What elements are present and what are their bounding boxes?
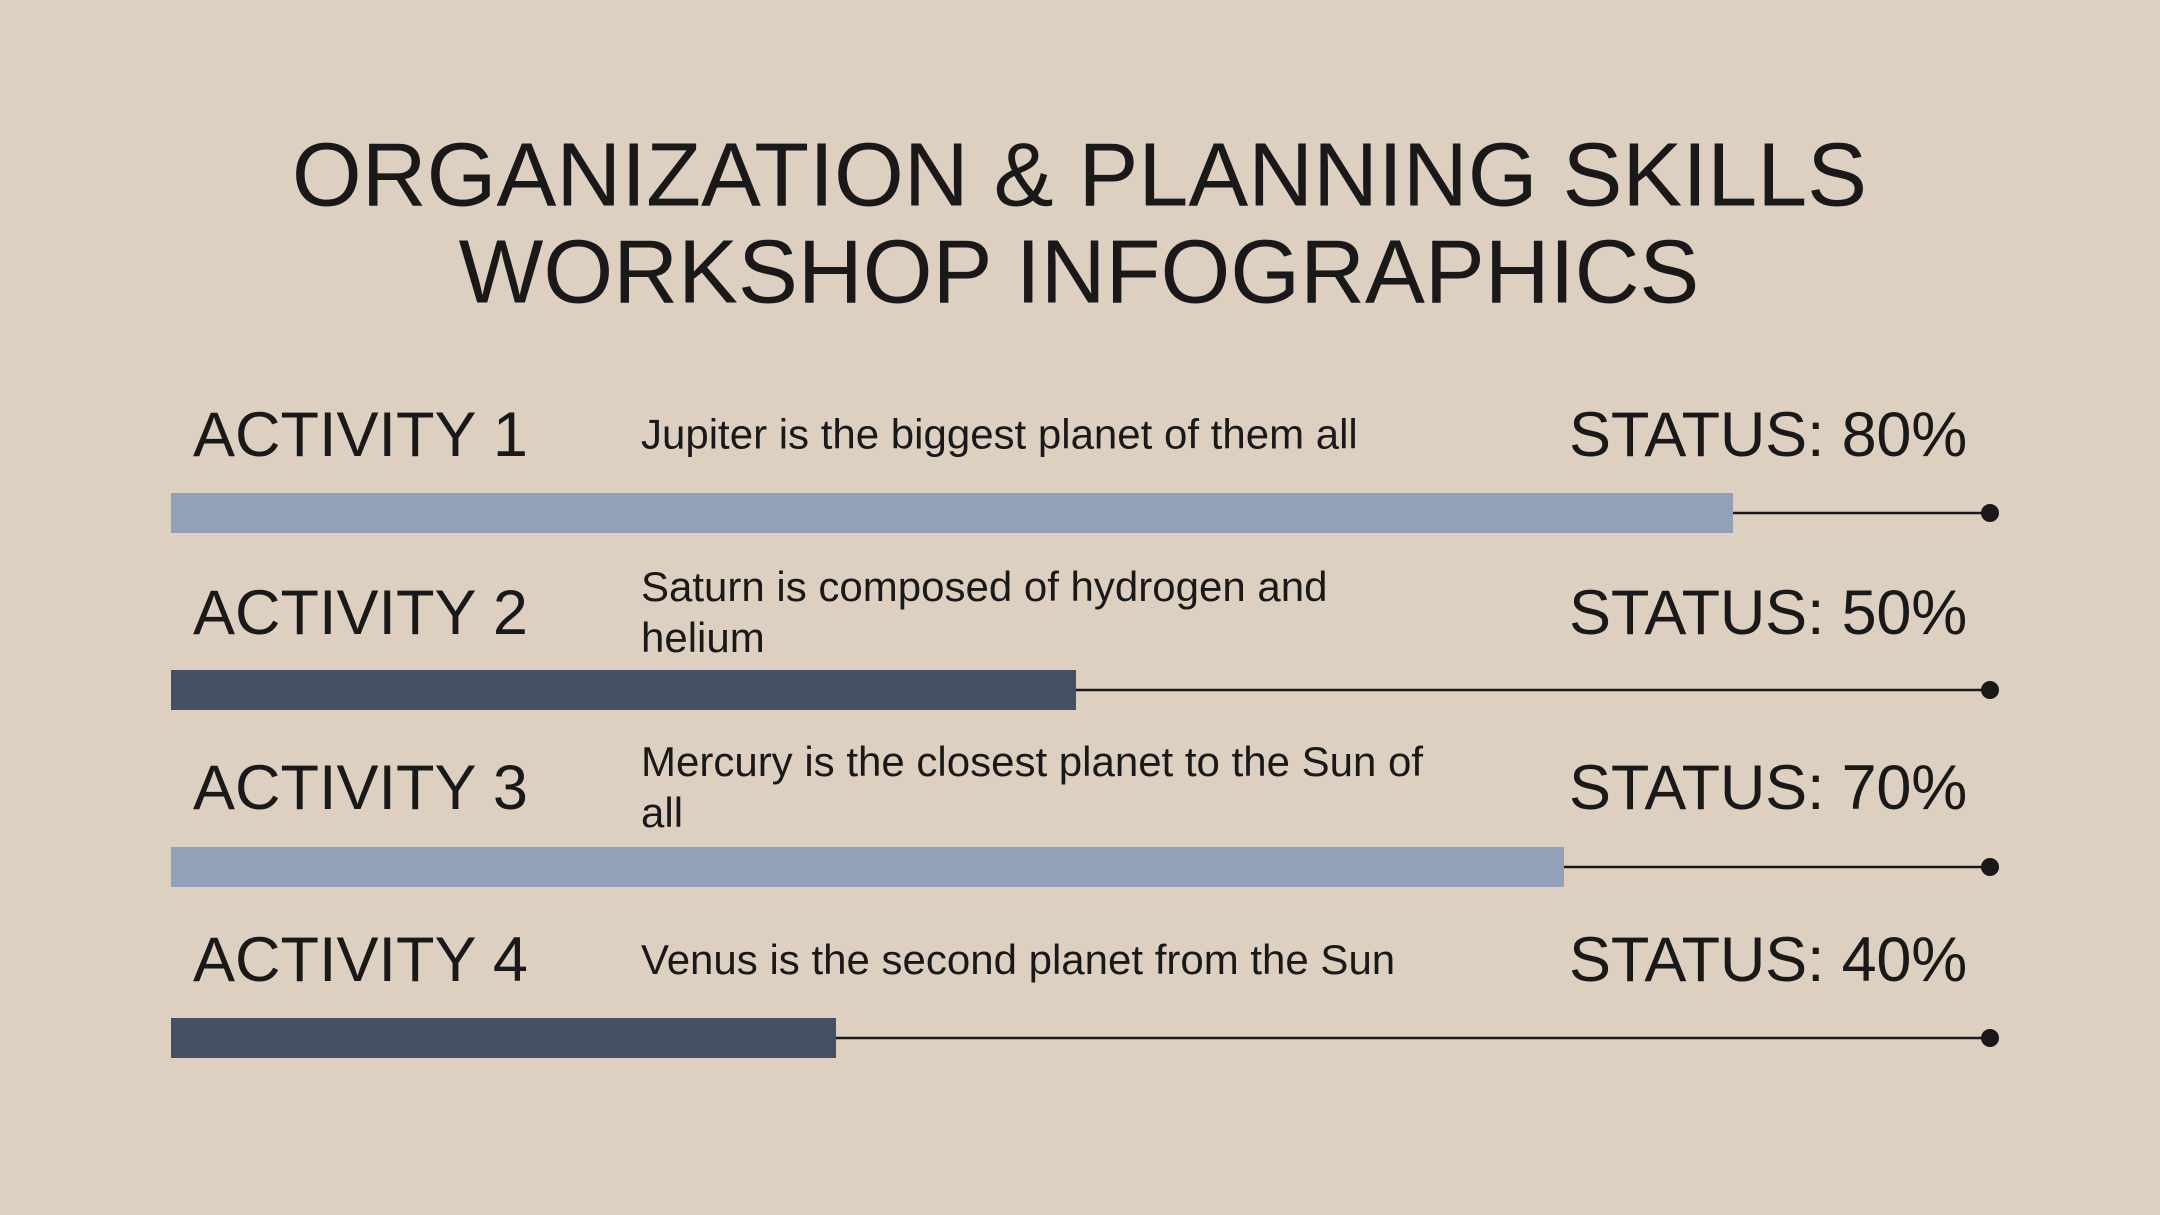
title [292, 126, 1867, 322]
activity 1 label: ACTIVITY 1 [193, 400, 528, 470]
panel: activity 2 [171, 563, 1999, 710]
activity 2 label: ACTIVITY 2 [193, 578, 528, 648]
activity 1 description: Jupiter is the biggest planet of them all [641, 410, 1358, 458]
activity 1 progress track [1733, 504, 1999, 522]
activity 4 label: ACTIVITY 4 [193, 925, 528, 995]
activity 4 progress track [836, 1029, 1999, 1047]
activity 2 description: Saturn is composed of hydrogen and [641, 563, 1327, 610]
activity 4 progress bar [171, 1018, 836, 1058]
activity 4 description: Venus is the second planet from the Sun [641, 936, 1395, 983]
activity 2 status: STATUS: 50% [1569, 578, 1967, 648]
panel: activity 3 [171, 738, 1999, 887]
activity 1 progress bar [171, 493, 1733, 533]
title: WORKSHOP INFOGRAPHICS [459, 222, 1699, 322]
activity 2 description [641, 563, 1327, 661]
activity 3 description [641, 738, 1423, 836]
activity 2 progress track [1076, 681, 1999, 699]
activity 3 description: Mercury is the closest planet to the Sun of [641, 738, 1423, 785]
panel: activity 1 [171, 400, 1999, 533]
panel: activity 4 [171, 925, 1999, 1058]
activity 3 progress bar [171, 847, 1564, 887]
activity 2 description: helium [641, 614, 765, 661]
activity 3 status: STATUS: 70% [1569, 753, 1967, 823]
activity 3 progress track [1564, 858, 1999, 876]
activity 4 status: STATUS: 40% [1569, 925, 1967, 995]
title: ORGANIZATION & PLANNING SKILLS [292, 126, 1867, 226]
activity 1 status: STATUS: 80% [1569, 400, 1967, 470]
activity 3 label: ACTIVITY 3 [193, 753, 528, 823]
activity 2 progress bar [171, 670, 1076, 710]
activity 3 description: all [641, 789, 683, 836]
